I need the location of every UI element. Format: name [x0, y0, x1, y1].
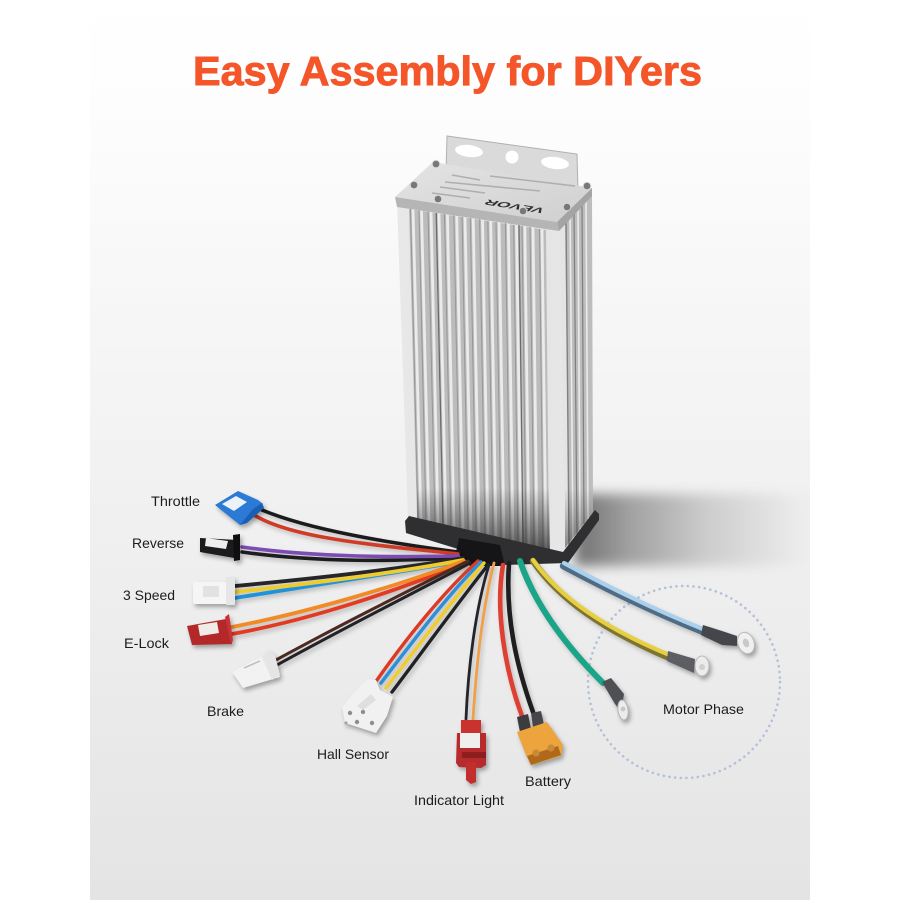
label: reverse: Reverse — [132, 535, 184, 551]
heat sink right side — [557, 190, 593, 553]
top lid — [395, 160, 592, 231]
wire bundle: reverse — [242, 547, 458, 560]
label: battery: Battery — [525, 773, 571, 789]
ring terminal: blue wire — [701, 625, 757, 656]
wire: motor phase green — [520, 561, 603, 683]
title: Easy Assembly for DIYers — [193, 48, 702, 94]
wire bundle: battery — [500, 563, 533, 716]
ring terminal: yellow wire — [667, 651, 709, 676]
label: indicator light: Indicator Light — [414, 792, 504, 808]
label: e-lock: E-Lock — [124, 635, 170, 651]
label: throttle: Throttle — [151, 493, 200, 509]
wire bundle: indicator light — [466, 563, 494, 719]
connector: 3 speed — [193, 577, 235, 605]
dotted circle: motor phase group — [588, 586, 780, 778]
wire gland — [456, 538, 505, 566]
heat sink front — [397, 202, 565, 554]
screws — [410, 160, 591, 215]
connector: reverse — [200, 534, 240, 561]
black base plate — [405, 510, 599, 565]
connector: hall sensor — [342, 679, 393, 733]
label: brake: Brake — [207, 703, 244, 719]
background panel — [90, 0, 810, 900]
wire bundle: throttle — [251, 510, 458, 554]
connector: throttle — [215, 491, 264, 525]
wire: motor phase yellow — [533, 560, 667, 657]
label: motor phase: Motor Phase — [663, 701, 744, 717]
ring terminal: green wire — [602, 678, 629, 721]
wire: motor phase blue — [563, 563, 703, 632]
connector: battery xt60 — [517, 711, 563, 765]
connector: indicator light — [456, 720, 486, 784]
wire bundle: e-lock — [232, 561, 466, 634]
wire bundle: 3 speed — [235, 558, 463, 598]
controller unit — [395, 136, 599, 566]
connector: brake — [232, 650, 280, 688]
wire bundle: brake — [276, 561, 470, 665]
connector: e-lock — [187, 614, 233, 645]
wire bundle: hall sensor — [377, 561, 488, 692]
infographic canvas — [90, 55, 810, 900]
label: hall sensor: Hall Sensor — [317, 746, 389, 762]
labels — [123, 493, 744, 808]
label: 3 speed: 3 Speed — [123, 587, 175, 603]
mounting bracket — [446, 136, 578, 192]
brand name on lid: VEVOR — [481, 197, 548, 214]
cast shadow of controller — [575, 494, 840, 566]
